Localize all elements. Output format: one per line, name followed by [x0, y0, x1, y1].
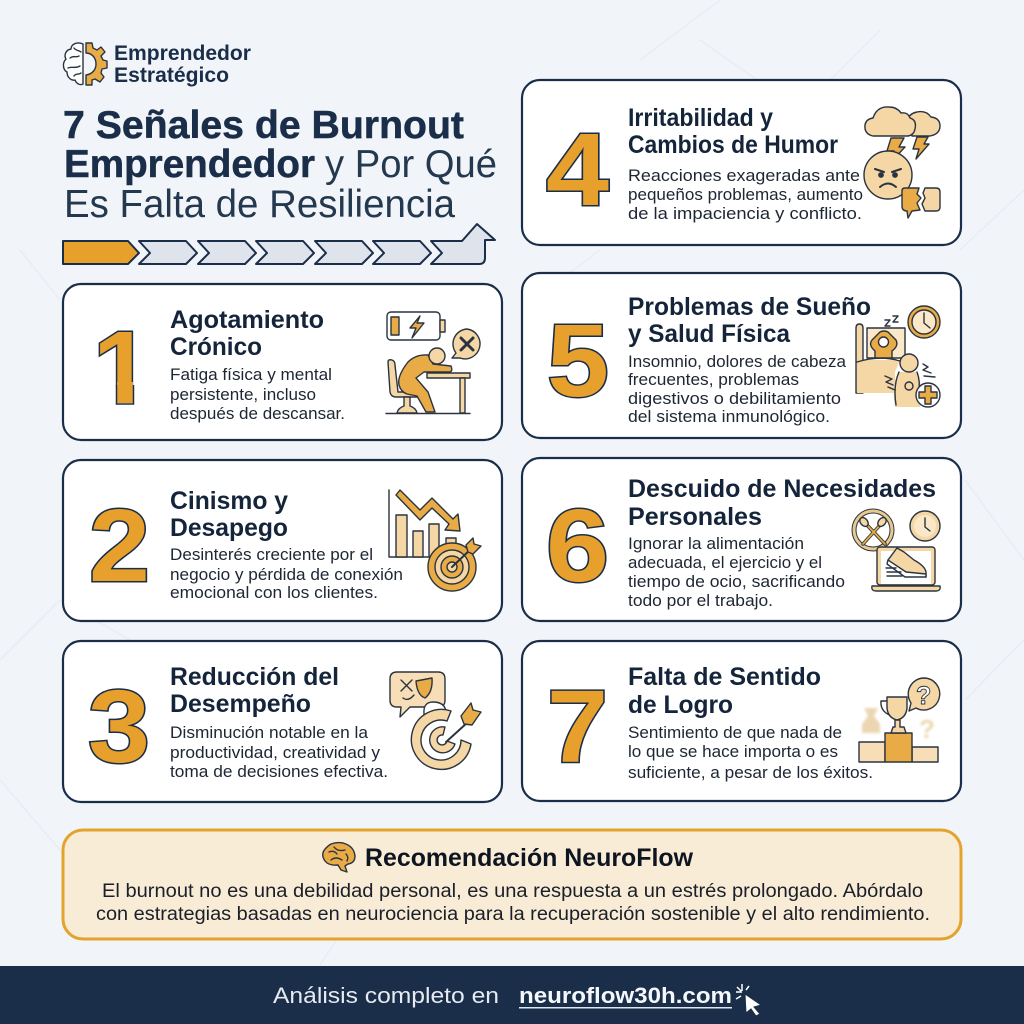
body 7: Sentimiento de que nada de [628, 724, 842, 742]
progress arrow bar [63, 224, 495, 264]
body 7: suficiente, a pesar de los éxitos. [628, 764, 873, 782]
heading 7: Falta de Sentido [628, 663, 821, 691]
number 2: 2 [89, 488, 150, 603]
body 7: lo que se hace importa o es [628, 743, 838, 761]
heading 6 [628, 475, 936, 531]
body 5 [628, 353, 847, 426]
number 6: 6 [546, 488, 609, 603]
icon: trophy on podium with question marks: ? [916, 682, 931, 710]
body 3: toma de decisiones efectiva. [170, 763, 388, 781]
body 1: persistente, incluso [170, 386, 316, 404]
icon: brain and gear [63, 43, 107, 85]
body 1: después de descansar. [170, 405, 345, 423]
heading 2: Desapego [170, 514, 288, 542]
icon: cursor click [736, 984, 761, 1016]
heading 3: Reducción del [170, 663, 339, 691]
heading 4: Cambios de Humor [628, 131, 838, 159]
icon: insomnia in bed, clock and health [856, 306, 940, 407]
icon: declining chart and target [389, 490, 481, 591]
body 1 [170, 366, 345, 423]
body 4: de la impaciencia y conflicto. [628, 205, 862, 223]
body 3 [170, 724, 388, 781]
heading 4: Irritabilidad y [628, 104, 773, 132]
heading 2 [170, 487, 288, 542]
number 1 [98, 330, 134, 405]
heading 5: y Salud Física [628, 320, 791, 348]
footer text: Análisis completo en [273, 983, 499, 1008]
body 7 [628, 724, 873, 782]
body 3: productividad, creatividad y [170, 744, 381, 762]
recommendation panel [63, 830, 961, 939]
card 1: Agotamiento Crónico [63, 284, 502, 440]
icon: mask bubble and broken target [390, 672, 481, 769]
body 2: emocional con los clientes. [170, 584, 378, 602]
heading 6: Descuido de Necesidades [628, 475, 936, 503]
number 5: 5 [547, 303, 609, 418]
body 3: Disminución notable en la [170, 724, 369, 742]
icon: trophy on podium with question marks [859, 678, 940, 762]
body 1: Fatiga física y mental [170, 366, 332, 384]
body 4: Reacciones exageradas ante [628, 167, 860, 185]
heading 5: Problemas de Sueño [628, 293, 871, 321]
heading 1: Agotamiento [170, 306, 324, 334]
card 4: Irritabilidad y Cambios de Humor [522, 80, 961, 245]
title [63, 104, 497, 226]
footer bar [0, 966, 1024, 1024]
icon: brain [323, 843, 355, 872]
heading 7 [628, 663, 821, 719]
icon: trophy on podium with question marks: ? [919, 714, 935, 744]
heading 2: Cinismo y [170, 487, 288, 515]
card 6: Descuido de Necesidades Personales [522, 458, 961, 621]
title: 7 Señales de Burnout [63, 104, 464, 147]
recommendation body [96, 881, 930, 925]
body 5: del sistema inmunológico. [628, 408, 830, 426]
card 7: Falta de Sentido de Logro [522, 641, 961, 801]
heading 1: Crónico [170, 333, 262, 361]
recommendation body: El burnout no es una debilidad personal, es una respuesta a un estrés prolongado. Abórdalo [102, 881, 923, 902]
heading 3 [170, 663, 339, 718]
logo text: Emprendedor [114, 42, 251, 65]
recommendation body: con estrategias basadas en neurociencia para la recuperación sostenible y el alto rendimiento. [96, 904, 930, 925]
heading 6: Personales [628, 503, 762, 531]
number 4: 4 [546, 112, 609, 227]
card 2: Cinismo y Desapego [63, 460, 502, 621]
footer link: neuroflow30h.com [519, 983, 732, 1008]
title: Emprendedor [64, 143, 315, 186]
body 2: Desinterés creciente por el [170, 546, 373, 564]
logo [63, 42, 251, 87]
body 6: tiempo de ocio, sacrificando [628, 573, 845, 591]
heading 4 [628, 104, 838, 159]
body 4 [628, 167, 863, 223]
body 2: negocio y pérdida de conexión [170, 566, 403, 584]
body 5: Insomnio, dolores de cabeza [628, 353, 847, 371]
heading 7: de Logro [628, 691, 733, 719]
body 4: pequeños problemas, aumento [628, 186, 863, 204]
icon: exhausted person at desk with low battery [386, 312, 480, 414]
icon: no food, clock, laptop with shoe [854, 511, 940, 591]
card 3: Reducción del Desempeño [63, 641, 502, 802]
title: Es Falta de Resiliencia [64, 183, 455, 226]
logo text [114, 42, 251, 87]
number 7: 7 [547, 669, 608, 784]
number 3: 3 [88, 669, 150, 784]
heading 5 [628, 293, 871, 348]
body 5: frecuentes, problemas [628, 371, 799, 389]
heading 1 [170, 306, 324, 361]
body 2 [170, 546, 403, 602]
number 1: 1 [93, 310, 151, 425]
body 6: Ignorar la alimentación [628, 535, 804, 553]
heading 3: Desempeño [170, 690, 311, 718]
recommendation heading: Recomendación NeuroFlow [365, 844, 694, 872]
icon: storm clouds, angry face, broken bubble [864, 107, 940, 218]
body 5: digestivos o debilitamiento [628, 390, 841, 408]
title: y Por Qué [325, 143, 497, 186]
body 6: todo por el trabajo. [628, 592, 773, 610]
body 6 [628, 535, 845, 610]
logo text: Estratégico [114, 64, 229, 87]
card 5: Problemas de Sueño y Salud Física [522, 273, 961, 438]
body 6: adecuada, el ejercicio y el [628, 554, 822, 572]
